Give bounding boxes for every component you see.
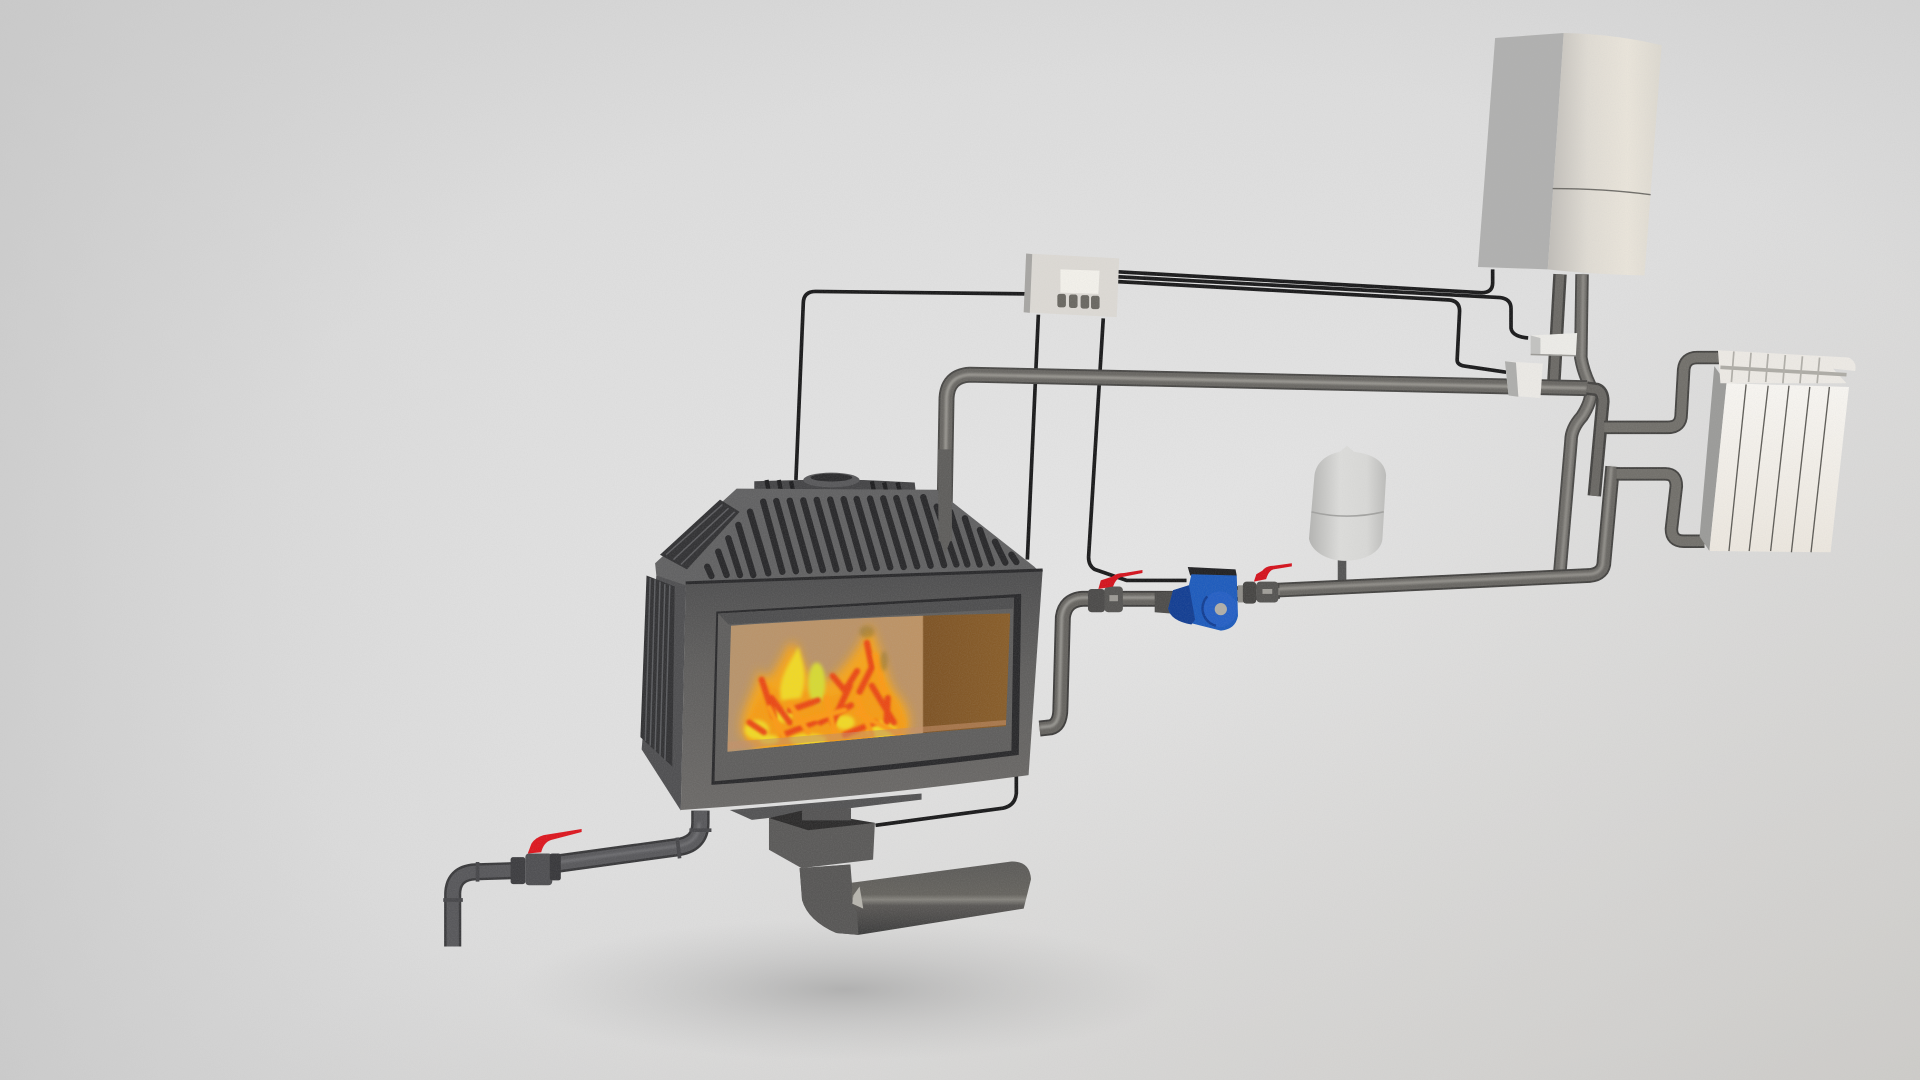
stove front frame <box>681 570 1043 810</box>
frame top shadow <box>686 570 1043 583</box>
radiator fins <box>1709 383 1849 552</box>
top horizontal pipe <box>944 375 1603 541</box>
pipe collars <box>443 830 711 900</box>
bottom pipe to stove <box>1040 591 1280 729</box>
tank neck <box>1339 553 1346 583</box>
hood left vent <box>660 500 740 569</box>
radiator <box>1700 350 1856 552</box>
boiler right face <box>1548 33 1662 276</box>
return pipe to radiator <box>1276 358 1719 590</box>
stove left side <box>642 576 686 811</box>
floor shadow <box>514 918 1176 1060</box>
left side ribs <box>640 576 675 767</box>
boiler <box>1478 33 1662 276</box>
door glass <box>722 610 1016 757</box>
flame red streaks <box>749 643 894 735</box>
stove hood <box>655 489 1042 588</box>
pump cap <box>1188 567 1237 576</box>
boiler lower cover seam <box>1553 189 1651 195</box>
radiator header <box>1718 350 1856 383</box>
inlet valve body <box>511 857 525 884</box>
inlet valve handle <box>528 829 582 853</box>
door recess <box>711 594 1021 785</box>
flame orange streaks <box>769 655 900 737</box>
control wires <box>796 269 1528 825</box>
flame yellow tongues <box>744 647 896 746</box>
glass bottom edge <box>727 720 1007 749</box>
duct pipe <box>800 862 1031 935</box>
flue duct <box>769 808 1031 935</box>
left valve handle <box>1098 570 1142 589</box>
door frame <box>714 598 1014 781</box>
stove base plate <box>730 793 922 820</box>
expansion tank <box>1309 446 1386 583</box>
flame dark patches <box>860 626 888 671</box>
control panel <box>1024 253 1119 317</box>
flame core <box>745 678 908 748</box>
fire glow <box>741 624 910 752</box>
duct box <box>769 818 875 868</box>
circulation pump <box>1168 567 1238 631</box>
panel buttons <box>1057 294 1100 309</box>
radiator side <box>1700 366 1727 551</box>
hood ribs <box>707 497 1016 576</box>
pipes from boiler <box>1554 274 1592 571</box>
boiler left face <box>1478 33 1564 269</box>
right valve handle <box>1254 563 1292 582</box>
temperature sensor boxes <box>1505 333 1577 398</box>
pump rotor <box>1202 591 1237 627</box>
tank body <box>1309 446 1386 561</box>
right valve <box>1238 563 1292 604</box>
door top band <box>718 598 1014 624</box>
left valve <box>1088 570 1183 613</box>
panel screen <box>1060 269 1100 294</box>
inlet pipe with valve <box>443 811 711 947</box>
fireplace stove <box>640 449 1043 820</box>
hood pipe <box>939 449 951 541</box>
stove top collar and vents <box>754 473 916 495</box>
duct highlight <box>852 887 863 909</box>
pump body <box>1168 574 1238 631</box>
